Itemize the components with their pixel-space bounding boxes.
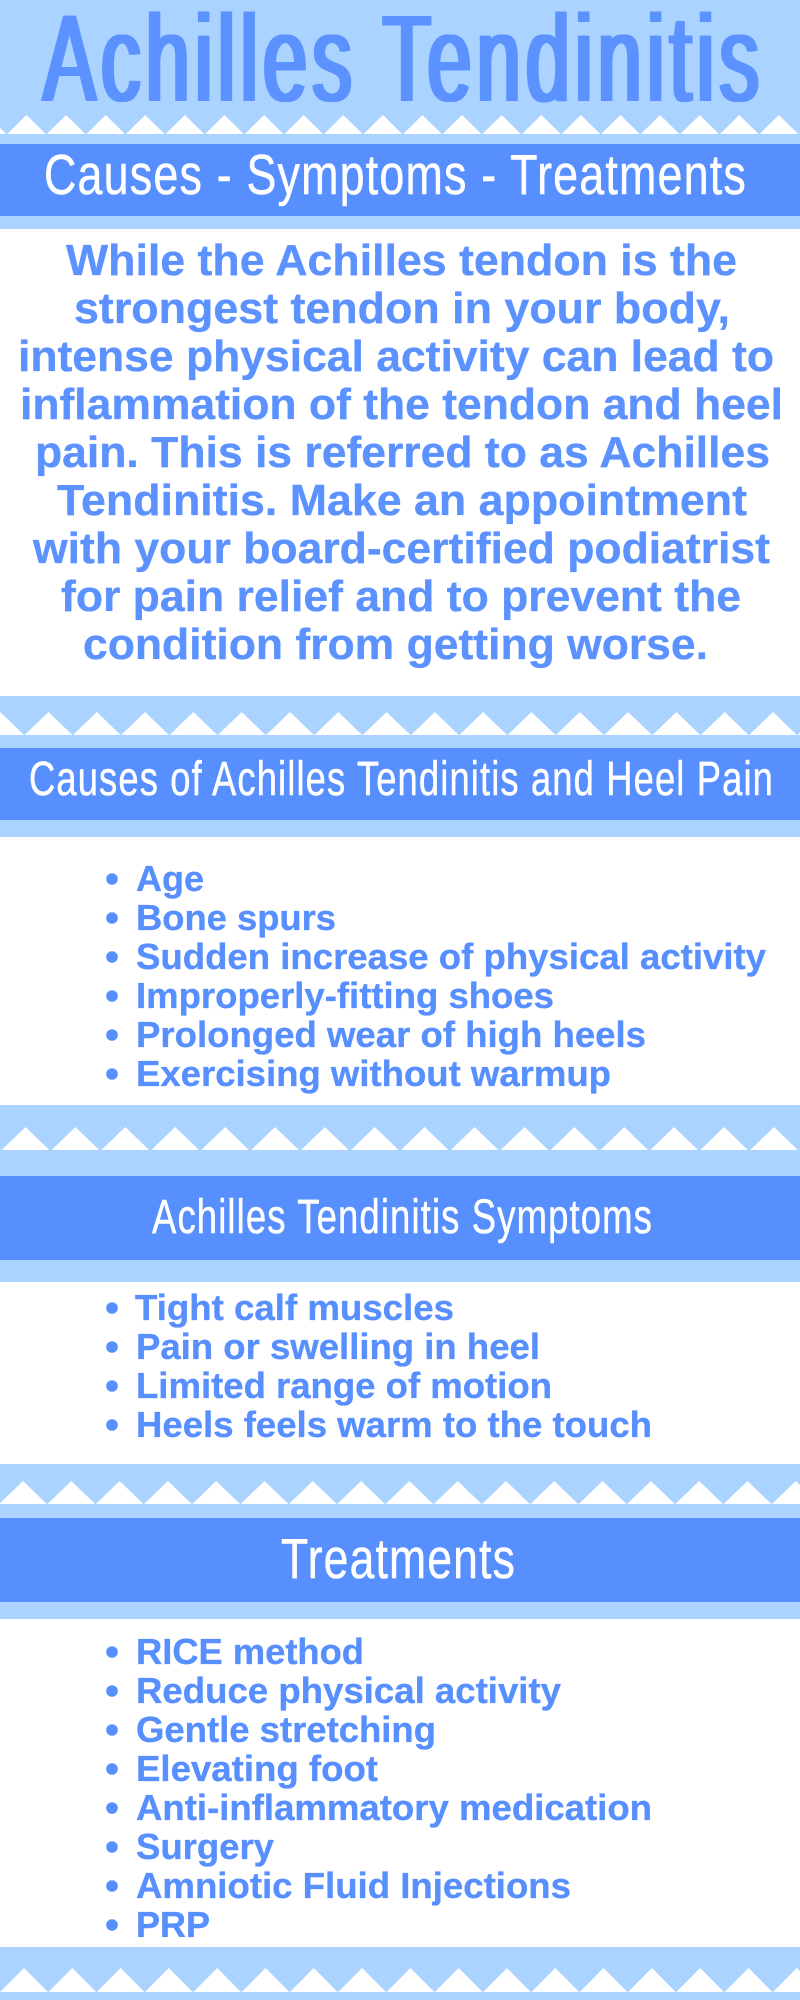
panel: title banner: [0, 0, 800, 229]
list: treatments: PRP: [136, 1904, 210, 1945]
list: symptoms: Pain or swelling in heel: [136, 1326, 540, 1367]
text block: introduction: While the Achilles tendon is the: [66, 236, 737, 285]
list: causes: Sudden increase of physical activity: [136, 936, 767, 977]
list: symptoms: [106, 1287, 652, 1445]
list: treatments: Elevating foot: [136, 1748, 378, 1789]
panel: zigzag band above symptoms: [0, 1105, 800, 1282]
list: causes: Age: [136, 858, 204, 899]
text block: introduction: for pain relief and to prevent the: [61, 572, 741, 621]
list: treatments: RICE method: [136, 1631, 364, 1672]
list: treatments: Amniotic Fluid Injections: [136, 1865, 571, 1906]
text block: introduction: with your board-certified podiatrist: [32, 524, 770, 573]
list: treatments: [106, 1631, 652, 1945]
text block: introduction: inflammation of the tendon and heel: [20, 380, 783, 429]
list: symptoms: Heels feels warm to the touch: [136, 1404, 652, 1445]
heading: symptoms: Achilles Tendinitis Symptoms: [152, 1191, 653, 1244]
list: causes: Prolonged wear of high heels: [136, 1014, 646, 1055]
text block: introduction: strongest tendon in your body,: [74, 284, 730, 333]
list: treatments: Anti-inflammatory medication: [136, 1787, 652, 1828]
text block: introduction: condition from getting worse.: [83, 620, 708, 669]
text block: introduction: [18, 236, 783, 669]
panel: bottom zigzag band: [0, 1947, 800, 2000]
list: causes: [106, 858, 767, 1094]
text block: introduction: Tendinitis. Make an appointment: [57, 476, 747, 525]
panel: zigzag band above treatments: [0, 1464, 800, 1619]
list: treatments: Reduce physical activity: [136, 1670, 562, 1711]
heading: symptoms: [0, 1176, 800, 1260]
list: causes: Bone spurs: [136, 897, 336, 938]
list: symptoms: Tight calf muscles: [135, 1287, 454, 1328]
list: treatments: Surgery: [136, 1826, 275, 1867]
heading: treatments: [0, 1518, 800, 1602]
panel: zigzag band above causes: [0, 696, 800, 837]
heading: treatments: Treatments: [281, 1527, 516, 1591]
list: symptoms: Limited range of motion: [136, 1365, 552, 1406]
list: treatments: Gentle stretching: [136, 1709, 436, 1750]
list: causes: Improperly-fitting shoes: [136, 975, 554, 1016]
text block: introduction: intense physical activity can lead to: [18, 332, 774, 381]
text block: introduction: pain. This is referred to as Achilles: [35, 428, 770, 477]
list: causes: Exercising without warmup: [136, 1053, 611, 1094]
